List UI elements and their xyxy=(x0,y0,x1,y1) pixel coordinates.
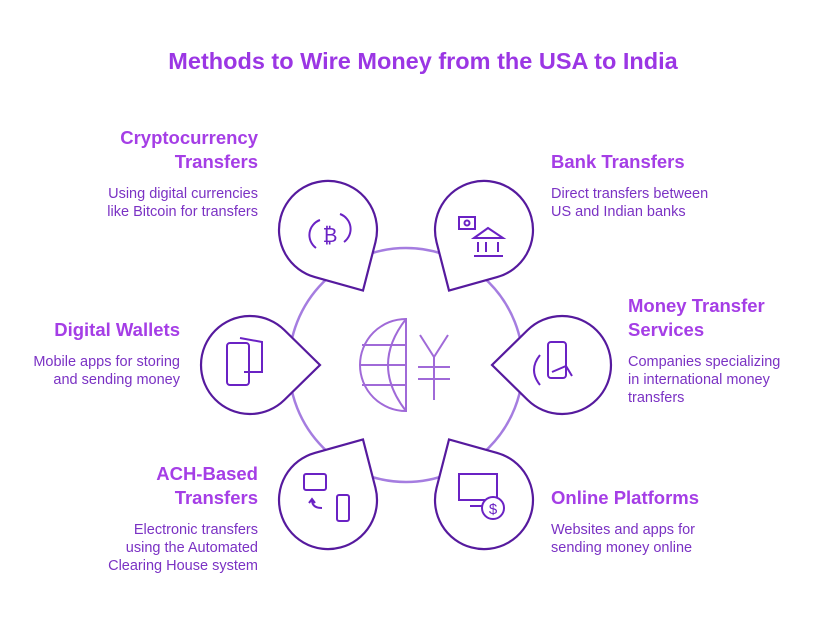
central circle xyxy=(289,248,523,482)
text: cryptocurrency: like Bitcoin for transfers xyxy=(107,204,258,220)
text: ACH xyxy=(108,463,258,574)
text: ACH: Electronic transfers xyxy=(134,522,258,538)
title: Methods to Wire Money from the USA to India xyxy=(168,48,678,74)
text: ACH: ACH-Based xyxy=(156,463,258,484)
icon: online: $ xyxy=(489,501,498,518)
text: money transfer: Companies specializing xyxy=(628,354,780,370)
icon: bitcoin: ₿ xyxy=(323,225,337,247)
text: ACH: Clearing House system xyxy=(108,558,258,574)
icon: bitcoin xyxy=(309,214,351,248)
text: money transfer: transfers xyxy=(628,390,684,406)
text: bank: US and Indian banks xyxy=(551,204,686,220)
pin: ACH xyxy=(261,415,405,567)
text: money transfer: Money Transfer xyxy=(628,295,765,316)
text: online: Websites and apps for xyxy=(551,522,695,538)
icon: globe and yen xyxy=(360,319,450,411)
text: ACH: using the Automated xyxy=(126,540,258,556)
text: bank xyxy=(551,151,708,220)
text: online: sending money online xyxy=(551,540,692,556)
icon: money transfer xyxy=(534,342,572,385)
text: cryptocurrency: Cryptocurrency xyxy=(120,127,258,148)
text: ACH: Transfers xyxy=(175,487,258,508)
text: digital wallets: Digital Wallets xyxy=(54,319,180,340)
text: cryptocurrency: Transfers xyxy=(175,151,258,172)
pin: digital wallets xyxy=(201,316,320,414)
text: digital wallets: and sending money xyxy=(53,372,180,388)
pin: money transfer xyxy=(492,316,611,414)
text: digital wallets: Mobile apps for storing xyxy=(33,354,180,370)
icon: ACH xyxy=(304,474,349,521)
icon: online xyxy=(459,474,504,519)
text: cryptocurrency xyxy=(107,127,258,220)
text: bank: Direct transfers between xyxy=(551,186,708,202)
icon: wallet xyxy=(227,338,262,385)
pin: online xyxy=(407,415,551,567)
text: online xyxy=(551,487,699,556)
text: cryptocurrency: Using digital currencies xyxy=(108,186,258,202)
pin: bank xyxy=(407,163,551,315)
text: bank: Bank Transfers xyxy=(551,151,685,172)
icon: bank xyxy=(459,217,503,256)
text: money transfer: Services xyxy=(628,319,704,340)
pin: cryptocurrency xyxy=(261,163,405,315)
text: online: Online Platforms xyxy=(551,487,699,508)
text: money transfer xyxy=(628,295,780,406)
text: money transfer: in international money xyxy=(628,372,770,388)
text: digital wallets xyxy=(33,319,180,388)
